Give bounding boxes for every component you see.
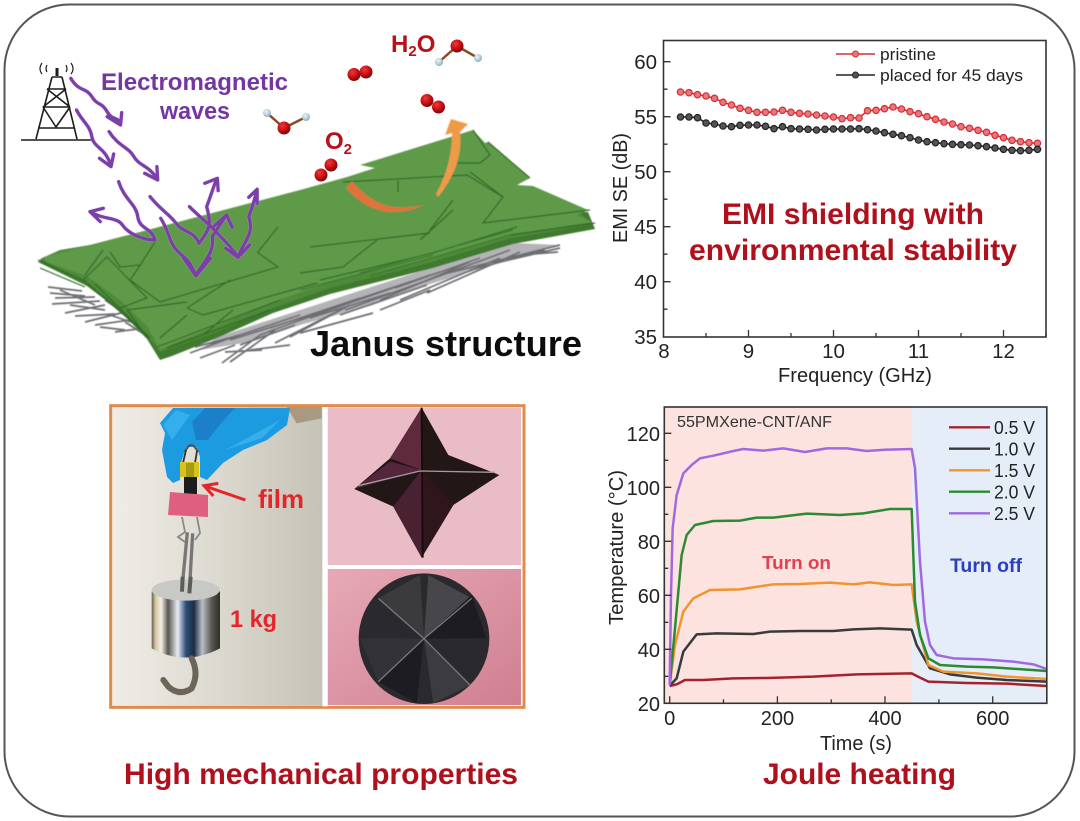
label: Electromagnetic waves: Electromagnetic [101, 69, 288, 96]
label: Turn on: Turn on [762, 552, 831, 573]
legend: 1.5 V [994, 461, 1035, 481]
x axis labels: 11 [908, 340, 929, 363]
photo: folded disc [328, 569, 521, 705]
label: Electromagnetic waves: waves [159, 98, 230, 125]
x axis labels: 8 [658, 340, 670, 363]
x axis labels: 400 [868, 708, 902, 730]
panel: Janus structure illustration [21, 31, 595, 364]
label: sample name: 55PMXene-CNT/ANF [677, 414, 832, 431]
y axis labels: 100 [627, 478, 660, 500]
arrow: film pointer [204, 483, 245, 500]
x axis labels: 200 [761, 708, 794, 730]
label: film: film [258, 484, 304, 514]
legend: pristine [880, 45, 936, 64]
label: Electromagnetic waves [101, 69, 288, 125]
y axis labels: 20 [638, 694, 660, 716]
legend: placed for 45 days [880, 66, 1023, 85]
axis title: EMI SE: EMI SE (dB) [610, 133, 632, 243]
panel: mechanical property photos [111, 406, 524, 707]
y axis labels: 40 [638, 640, 660, 662]
series: placed for 45 days [680, 117, 1038, 151]
y axis labels: 60 [634, 51, 657, 74]
x axis labels: 10 [822, 340, 845, 363]
y axis labels: 80 [638, 532, 660, 554]
legend [949, 418, 1035, 524]
top sheet [44, 130, 592, 350]
glove, clip and film (page coordinates) [160, 408, 290, 542]
legend: 2.5 V [994, 504, 1035, 524]
axis title: Time: Time (s) [820, 733, 892, 755]
x axis labels: 600 [976, 708, 1009, 730]
legend: 2.0 V [994, 482, 1035, 502]
molecules: water [263, 40, 482, 134]
heading: High mechanical properties: High mechanical properties [124, 758, 518, 791]
legend [836, 45, 1023, 85]
label: H2O: O [417, 31, 435, 58]
chart: temperature vs time [606, 407, 1047, 755]
panel border [111, 406, 524, 707]
background: turn on / turn off [664, 407, 1047, 703]
photo: folded star [328, 408, 521, 565]
heading: Joule heating: Joule heating [763, 758, 956, 791]
y axis labels: 120 [627, 424, 660, 446]
y axis labels: 60 [638, 586, 660, 608]
y axis labels: 55 [634, 106, 657, 129]
x axis labels: 9 [743, 340, 754, 363]
molecules: oxygen [314, 66, 445, 182]
y axis labels [634, 51, 657, 349]
x axis labels [664, 708, 1009, 730]
heading: EMI shielding: EMI shielding with [722, 198, 984, 231]
label: O2: 2 [344, 141, 352, 158]
x axis labels: 0 [664, 708, 675, 730]
series: pristine [680, 92, 1038, 143]
y axis labels: 50 [634, 161, 657, 184]
sheets and fibres [38, 119, 595, 363]
heading: EMI shielding [689, 198, 1017, 267]
axis title: Temperature: Temperature (°C) [606, 470, 628, 625]
x axis labels [658, 340, 1015, 363]
legend: 0.5 V [994, 418, 1035, 438]
y axis labels: 40 [634, 271, 657, 294]
label: O2: O [325, 128, 344, 155]
axis title: Frequency: Frequency (GHz) [778, 365, 932, 387]
arrow: orange gas escape [346, 181, 424, 212]
chart: EMI SE vs frequency [610, 40, 1046, 387]
arrows: electromagnetic waves [71, 78, 257, 276]
x axis labels: 12 [992, 340, 1015, 363]
photo: hanging weight [112, 407, 323, 706]
ticks [664, 433, 993, 703]
label: H2O: H [391, 31, 408, 58]
icon: antenna tower [21, 63, 92, 140]
legend: 1.0 V [994, 440, 1035, 460]
label: 1 kg: 1 kg [230, 606, 277, 633]
y axis labels: 45 [634, 216, 657, 239]
y axis labels: 35 [634, 326, 657, 349]
series: temperature curves [670, 448, 1047, 686]
label: H2O: 2 [408, 43, 417, 60]
lower sheets [38, 210, 595, 360]
label: Turn off: Turn off [950, 556, 1023, 577]
flake edges [38, 130, 595, 348]
ticks [664, 62, 1046, 337]
fibre layer [48, 243, 560, 363]
heading: Janus structure: Janus structure [310, 323, 582, 364]
y axis labels [627, 424, 660, 716]
heading: EMI shielding: environmental stability [689, 234, 1017, 267]
